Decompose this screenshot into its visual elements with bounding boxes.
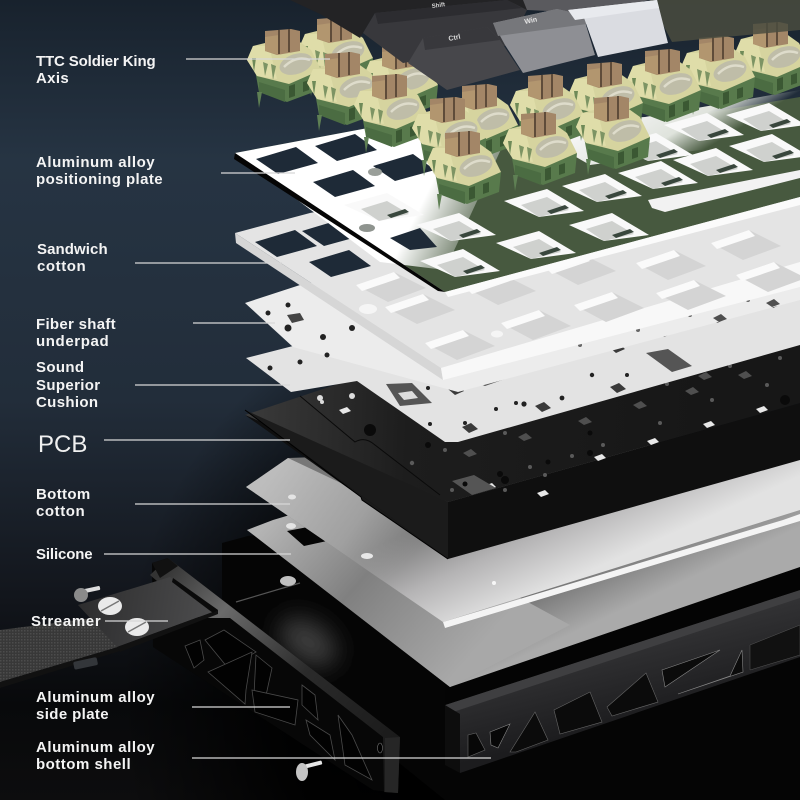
icon: screw 1: [98, 597, 122, 615]
icon: screw 2: [125, 618, 149, 636]
plate key holes: [256, 103, 800, 277]
silicone cut-out: [287, 527, 327, 546]
panel: aluminum alloy side plate: [150, 558, 400, 793]
panel: aluminum alloy positioning plate: [234, 90, 800, 297]
icon: screw 3: [74, 586, 100, 602]
icon: loose screw: [296, 760, 322, 781]
label: Aluminum alloy bottom shell: [36, 739, 491, 773]
label: Sandwich cotton: [37, 241, 282, 275]
sandwich cotton cells: [255, 219, 800, 360]
keycap: shift: Shift: [431, 2, 445, 10]
label: Sound Superior Cushion: [36, 359, 290, 411]
label: TTC Soldier King Axis: [36, 53, 330, 87]
label: TTC Soldier King Axis: Axis: [36, 70, 69, 87]
keycap: ctrl: [408, 27, 520, 90]
panel: PCB: [245, 340, 800, 559]
label: Fiber shaft underpad: [36, 316, 275, 350]
label: Streamer: [31, 613, 168, 630]
label: Fiber shaft underpad: Fiber shaft: [36, 316, 116, 333]
panel: sandwich cotton: [235, 120, 800, 380]
label: Aluminum alloy bottom shell: Aluminum alloy: [36, 739, 155, 756]
front rail: [445, 590, 800, 773]
keycap: win: Win: [524, 16, 538, 26]
translucent keyboard behind: [650, 0, 800, 42]
keycap: ctrl: Ctrl: [448, 34, 461, 43]
panel: sound superior cushion: [246, 210, 800, 442]
label: Silicone: Silicone: [36, 546, 93, 563]
label: Sound Superior Cushion: Superior: [36, 377, 100, 394]
label: Streamer: Streamer: [31, 613, 101, 630]
label: Sound Superior Cushion: Cushion: [36, 394, 98, 411]
label: TTC Soldier King Axis: TTC Soldier King: [36, 53, 156, 70]
icon: ribbon streamer: [0, 577, 218, 688]
label: Bottom cotton: Bottom: [36, 486, 91, 503]
label: Sound Superior Cushion: Sound: [36, 359, 84, 376]
panel: bottom cotton: [246, 440, 800, 628]
keycap: upper row: [290, 0, 600, 38]
label: Aluminum alloy bottom shell: bottom shell: [36, 756, 131, 773]
panel: aluminum alloy bottom shell: [222, 480, 800, 800]
label: Sandwich cotton: cotton: [37, 258, 86, 275]
label: Aluminum alloy side plate: side plate: [36, 706, 109, 723]
label: Aluminum alloy side plate: Aluminum alloy: [36, 689, 155, 706]
panel: silicone layer: [247, 440, 800, 687]
label: Aluminum alloy positioning plate: positioning plate: [36, 171, 163, 188]
panel: TTC Soldier King switches: [247, 17, 800, 210]
side plate lattice: [185, 630, 372, 780]
label: PCB: PCB: [38, 431, 87, 458]
cushion cut-outs: [268, 298, 782, 433]
label: Aluminum alloy positioning plate: [36, 154, 295, 188]
label: Bottom cotton: [36, 486, 290, 520]
PCB component pads: [317, 356, 790, 497]
label: Fiber shaft underpad: underpad: [36, 333, 109, 350]
panel: fiber shaft underpad: [245, 190, 800, 392]
panel: keycaps: [290, 0, 800, 90]
streamer metal tab: [78, 577, 218, 647]
keycap: light: [568, 0, 668, 57]
keycap: win: [493, 9, 595, 73]
icon: screw under ribbon: [73, 657, 98, 670]
label: Bottom cotton: cotton: [36, 503, 85, 520]
label: Aluminum alloy side plate: [36, 689, 290, 723]
label: Sandwich cotton: Sandwich: [37, 241, 108, 258]
label: Aluminum alloy positioning plate: Aluminum alloy: [36, 154, 155, 171]
keycap: grey behind: [523, 0, 650, 12]
keycap: shift: [363, 0, 527, 63]
